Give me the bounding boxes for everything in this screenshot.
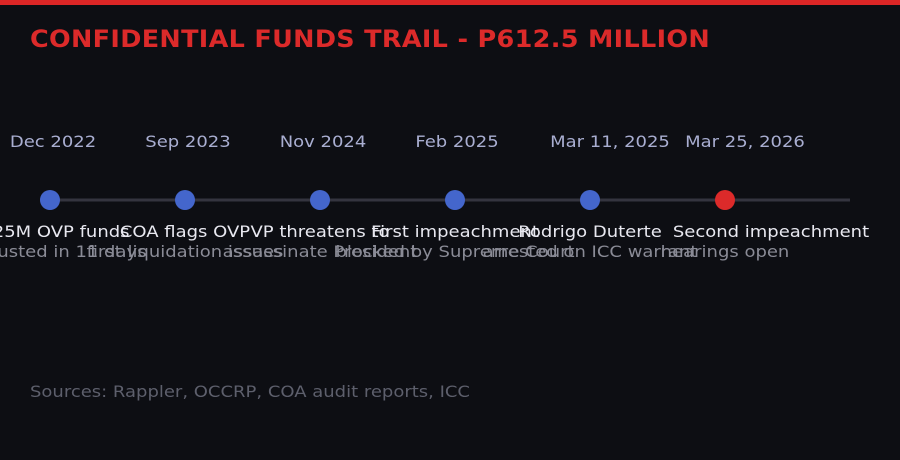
event: Nov 2024 — [223, 133, 418, 262]
event: Feb 2025: blocked by Supreme Court — [335, 243, 575, 262]
title: CONFIDENTIAL FUNDS TRAIL - P612.5 MILLION — [30, 25, 710, 53]
event: Mar 11, 2025: Mar 11, 2025 — [550, 133, 670, 152]
event: Feb 2025: Feb 2025 — [415, 133, 499, 152]
event: Mar 25, 2026: Second impeachment — [673, 223, 869, 242]
event: Sep 2023 — [87, 133, 284, 262]
event: Dec 2022: Dec 2022 — [10, 133, 96, 152]
event: Mar 25, 2026 — [661, 133, 869, 262]
event: Nov 2024: Nov 2024 — [280, 133, 366, 152]
event: Feb 2025 — [335, 133, 575, 262]
event: Mar 25, 2026: hearings open — [661, 243, 789, 262]
event: Nov 2024: assassinate President — [223, 243, 418, 262]
event: Feb 2025: First impeachment — [371, 223, 539, 242]
event: Sep 2023: Sep 2023 — [145, 133, 231, 152]
event: Dec 2022 — [0, 133, 147, 262]
sources: Sources: Rappler, OCCRP, COA audit reports, ICC — [30, 383, 470, 402]
event: Mar 11, 2025: arrested on ICC warrant — [483, 243, 698, 262]
event: Sep 2023: COA flags OVP — [120, 223, 250, 242]
timeline — [0, 133, 869, 262]
event: Mar 11, 2025 — [483, 133, 698, 262]
event: Nov 2024: VP threatens to — [250, 223, 390, 242]
event: Mar 11, 2025: Rodrigo Duterte — [518, 223, 662, 242]
event: Sep 2023: first liquidation issues — [87, 243, 284, 262]
event: Mar 25, 2026: Mar 25, 2026 — [685, 133, 805, 152]
